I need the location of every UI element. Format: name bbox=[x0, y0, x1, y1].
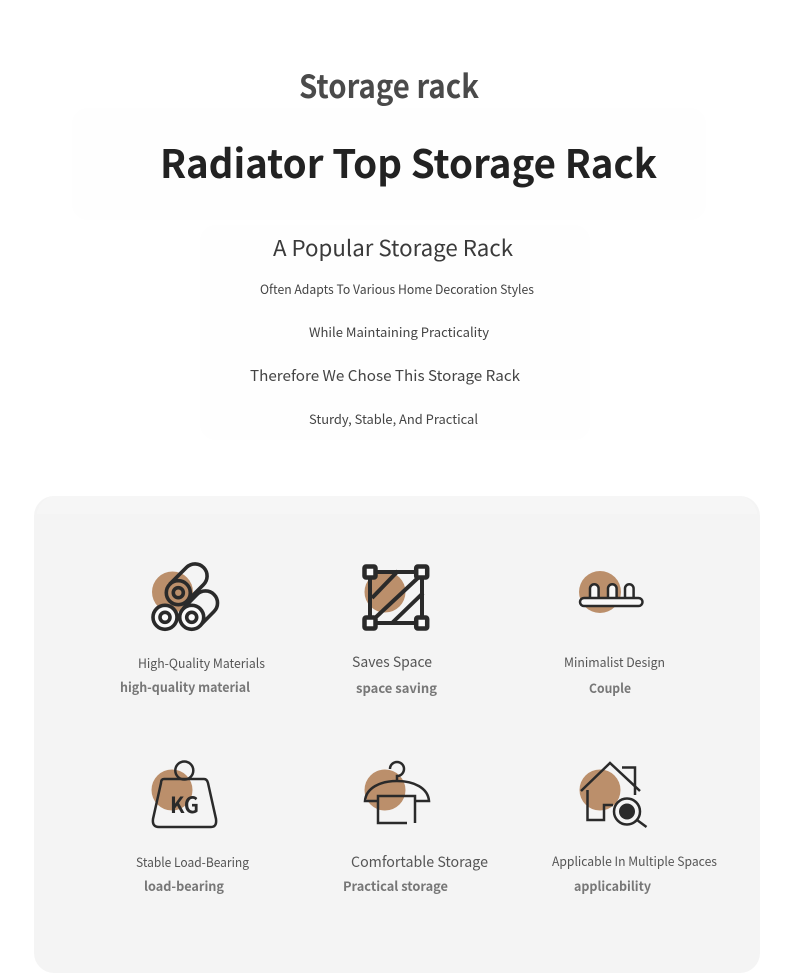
label: High-Quality Materials: high-quality material bbox=[120, 677, 250, 696]
icon: minimalist shelf bbox=[579, 571, 642, 613]
label: Applicable In Multiple Spaces: applicability bbox=[574, 876, 652, 895]
label: Stable Load-Bearing: load-bearing bbox=[144, 876, 224, 895]
label: Stable Load-Bearing: Stable Load-Bearing bbox=[136, 852, 250, 871]
label: Comfortable Storage: Practical storage bbox=[343, 876, 448, 895]
label: Saves Space bbox=[352, 651, 437, 697]
icon: KG weight bbox=[152, 762, 216, 827]
icon: space frame bbox=[364, 566, 427, 628]
icon: KG weight: KG bbox=[170, 788, 199, 820]
label: High-Quality Materials: High-Quality Materials bbox=[138, 653, 265, 672]
label: Saves Space: Saves Space bbox=[352, 651, 432, 672]
subtitle: Storage rack: Storage rack bbox=[299, 62, 480, 108]
label: Comfortable Storage bbox=[343, 851, 488, 895]
label: Stable Load-Bearing bbox=[136, 852, 250, 895]
label: Minimalist Design bbox=[564, 652, 665, 697]
panel: background card bbox=[34, 496, 760, 973]
heading: A Popular Storage Rack: A Popular Storage Rack bbox=[273, 231, 513, 263]
text block: description lines: Therefore We Chose This Storage Rack bbox=[250, 365, 521, 386]
text block: description lines: Sturdy, Stable, And Practical bbox=[309, 409, 478, 428]
text block: description lines bbox=[250, 279, 534, 428]
label: Saves Space: space saving bbox=[356, 678, 437, 697]
icon: rolled materials bbox=[152, 564, 218, 629]
label: Applicable In Multiple Spaces bbox=[552, 851, 717, 895]
text block: description lines: Often Adapts To Various Home Decoration Styles bbox=[260, 279, 534, 298]
title: Radiator Top Storage Rack bbox=[160, 134, 657, 190]
icon: house with magnifier bbox=[580, 763, 646, 827]
label: Applicable In Multiple Spaces: Applicable In Multiple Spaces bbox=[552, 851, 717, 870]
label: Minimalist Design: Couple bbox=[589, 678, 631, 697]
label: Minimalist Design: Minimalist Design bbox=[564, 652, 665, 671]
label: High-Quality Materials bbox=[120, 653, 265, 696]
icon: hanger with box bbox=[364, 762, 429, 823]
text block: description lines: While Maintaining Practicality bbox=[309, 322, 489, 341]
label: Comfortable Storage: Comfortable Storage bbox=[351, 851, 488, 872]
